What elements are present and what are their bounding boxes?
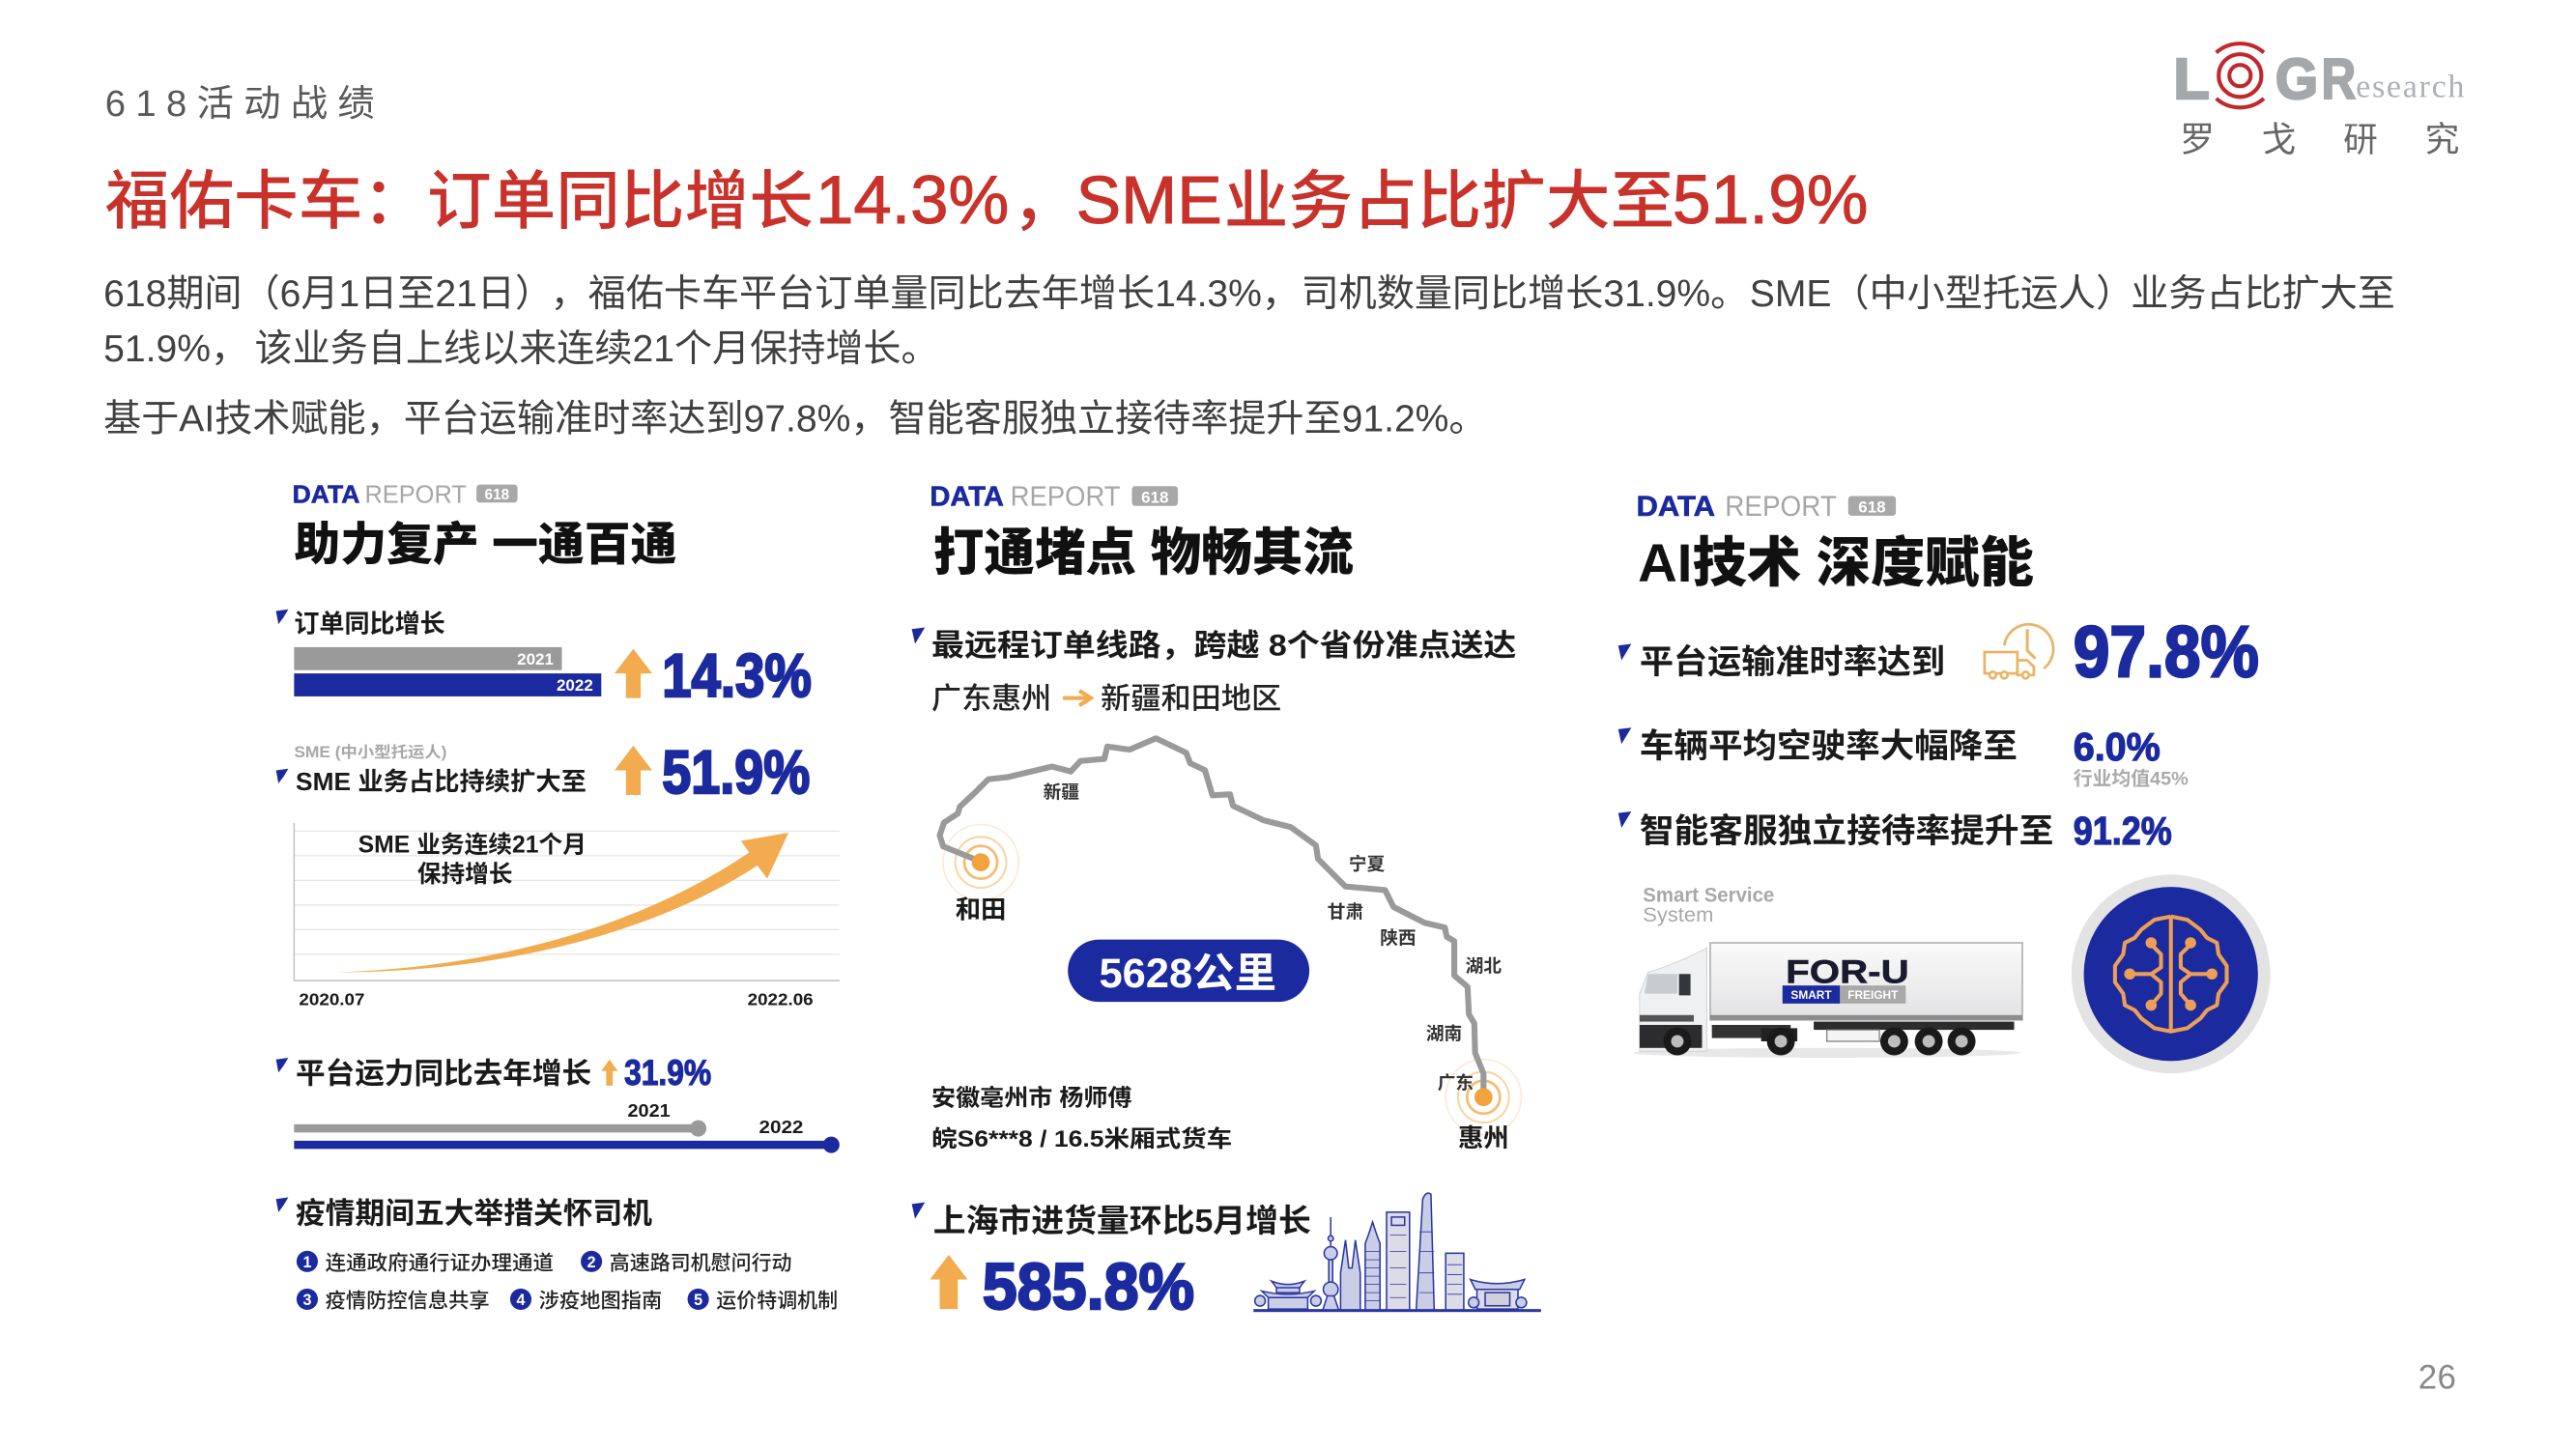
data report tag: REPORT: [1011, 482, 1121, 513]
empty-load rate: 车辆平均空驶率大幅降至: [1640, 727, 2018, 765]
customer service rate: 智能客服独立接待率提升至: [1640, 812, 2053, 850]
measures list: 1: [302, 1254, 311, 1271]
longest route text: 新疆和田地区: [1101, 683, 1281, 716]
route map: 湖南: [1426, 1023, 1462, 1043]
customer service rate: [1618, 809, 2172, 853]
shanghai growth: [912, 1203, 1311, 1323]
order growth block: 2021: [517, 650, 554, 668]
longest route text: [912, 628, 1516, 716]
data report tag: [293, 481, 518, 508]
logo: LOG Research: L: [2173, 46, 2210, 111]
chart: SME growth curve: 保持增长: [417, 861, 512, 888]
measures list: 5: [694, 1292, 702, 1309]
measures list: 疫情期间五大举措关怀司机: [296, 1198, 652, 1231]
shanghai growth: 上海市进货量环比5月增长: [933, 1204, 1311, 1239]
data report tag: [930, 482, 1178, 513]
route map: 甘肃: [1328, 901, 1363, 922]
logo: LOG Research: G: [2275, 46, 2318, 111]
intro paragraph: 司机数量同比增长31.9%。: [1302, 273, 1748, 315]
truck illustration: SMART: [1790, 988, 1832, 1002]
data report tag: DATA: [1636, 491, 1715, 523]
title: 14.3%: [816, 161, 1009, 238]
title: 福佑卡车：订单同比增长: [105, 166, 814, 238]
panel: AI技术 深度赋能: [1618, 491, 2271, 1073]
smart service label: Smart Service: [1643, 883, 1774, 906]
capacity growth block: 平台运力同比去年增长: [296, 1056, 591, 1090]
empty-load rate: 行业均值45%: [2074, 769, 2189, 790]
route map: 新疆: [1044, 781, 1079, 802]
heading: 助力复产 一通百通: [294, 520, 677, 571]
data report tag: 618: [485, 487, 510, 503]
measures list: 2: [587, 1254, 596, 1271]
measures list: 涉疫地图指南: [539, 1289, 662, 1312]
truck illustration: FOR-U: [1786, 954, 1909, 991]
chart: SME growth curve: [294, 823, 840, 1009]
SME share block: [276, 739, 810, 807]
longest route text: 广东惠州: [931, 683, 1051, 716]
empty-load rate: 6.0%: [2074, 724, 2161, 769]
intro paragraph: 51.9%，: [103, 328, 248, 370]
route map: 陕西: [1380, 928, 1417, 949]
data report tag: 618: [1141, 488, 1168, 506]
truck illustration: FREIGHT: [1847, 988, 1899, 1002]
data report tag: REPORT: [1725, 491, 1837, 523]
intro paragraph: ，: [551, 273, 588, 315]
route map: 惠州: [1458, 1123, 1509, 1152]
capacity growth block: [276, 1052, 840, 1153]
intro paragraph: SME（中小型托运人）: [1750, 273, 2133, 315]
order growth block: [276, 610, 812, 710]
smart service label: System: [1643, 903, 1713, 926]
measures list: 4: [516, 1292, 525, 1309]
on-time rate: [1618, 611, 2259, 693]
logo: LOG Research: 罗戈研究: [2180, 120, 2459, 158]
panel: 助力复产 一通百通: [276, 481, 840, 1312]
order growth block: 14.3%: [662, 642, 812, 710]
chart: SME growth curve: 2020.07: [299, 990, 365, 1009]
intro paragraph: 618期间（6月1日至21日）: [103, 273, 553, 315]
data report tag: DATA: [930, 482, 1004, 513]
capacity growth block: 2022: [759, 1117, 803, 1137]
distance pill: 5628公里: [1099, 952, 1276, 997]
logo: LOG Research: esearch: [2356, 69, 2464, 104]
logo: LOG Research: [2173, 43, 2464, 158]
customer service rate: 91.2%: [2074, 809, 2172, 853]
capacity growth block: 2021: [627, 1100, 671, 1121]
measures list: 3: [302, 1292, 311, 1309]
shanghai growth: 585.8%: [983, 1250, 1194, 1323]
chart: SME growth curve: SME 业务连续21个月: [358, 831, 587, 858]
route map: [940, 738, 1521, 1152]
logo: LOG Research: R: [2321, 46, 2356, 111]
on-time rate: 97.8%: [2074, 611, 2259, 693]
icon: clock and truck: [1985, 624, 2053, 678]
title: ，: [1012, 166, 1076, 238]
intro paragraph: 基于AI技术赋能，平台运输准时率达到97.8%，智能客服独立接待率提升至91.2%。: [103, 398, 1487, 440]
driver info: 安徽亳州市 杨师傅: [931, 1085, 1132, 1111]
smart service label: [1643, 883, 1774, 926]
capacity growth block: 31.9%: [624, 1052, 711, 1093]
order growth block: 订单同比增长: [294, 610, 445, 639]
panel: 打通堵点 物畅其流: [912, 482, 1541, 1323]
icon: shanghai skyline: [1253, 1193, 1541, 1312]
intro paragraph: [103, 273, 2395, 440]
driver info: 皖S6***8 / 16.5米厢式货车: [931, 1126, 1232, 1152]
section label: 618活动战绩: [105, 83, 375, 125]
SME share block: SME 业务占比持续扩大至: [296, 767, 587, 796]
route map: 广东: [1438, 1072, 1474, 1093]
data report tag: 618: [1858, 497, 1886, 516]
data report tag: [1636, 491, 1896, 523]
measures list: 连通政府通行证办理通道: [326, 1251, 554, 1274]
measures list: 疫情防控信息共享: [326, 1289, 490, 1312]
heading: AI技术 深度赋能: [1638, 532, 2034, 593]
title: 业务占比扩大至: [1224, 166, 1674, 238]
measures list: [276, 1198, 838, 1312]
driver info: [931, 1085, 1232, 1152]
heading: 打通堵点 物畅其流: [933, 525, 1354, 582]
route map: 宁夏: [1349, 854, 1386, 874]
distance pill: [1068, 940, 1309, 1002]
longest route text: 最远程订单线路，跨越 8个省份准点送达: [931, 628, 1516, 662]
SME share block: SME (中小型托运人): [294, 744, 446, 761]
icon: AI brain: [2072, 874, 2271, 1073]
route map: 湖北: [1466, 956, 1502, 977]
intro paragraph: 福佑卡车平台订单量同比去年增长14.3%，: [588, 273, 1300, 315]
truck illustration: [1633, 943, 2022, 1058]
data report tag: DATA: [293, 481, 359, 508]
data report tag: REPORT: [364, 481, 467, 508]
intro paragraph: 该业务自上线以来连续21个月保持增长。: [255, 328, 939, 370]
empty-load rate: [1618, 724, 2189, 790]
page number: 26: [2419, 1359, 2456, 1397]
title: SME: [1076, 162, 1222, 238]
title: 51.9%: [1673, 161, 1868, 239]
intro paragraph: 业务占比扩大至: [2131, 273, 2395, 315]
chart: SME growth curve: 2022.06: [748, 990, 814, 1009]
SME share block: 51.9%: [662, 739, 810, 807]
order growth block: 2022: [557, 676, 593, 695]
on-time rate: 平台运输准时率达到: [1640, 643, 1945, 681]
measures list: 高速路司机慰问行动: [610, 1251, 792, 1274]
measures list: 运价特调机制: [716, 1289, 838, 1312]
route map: 和田: [956, 895, 1006, 923]
